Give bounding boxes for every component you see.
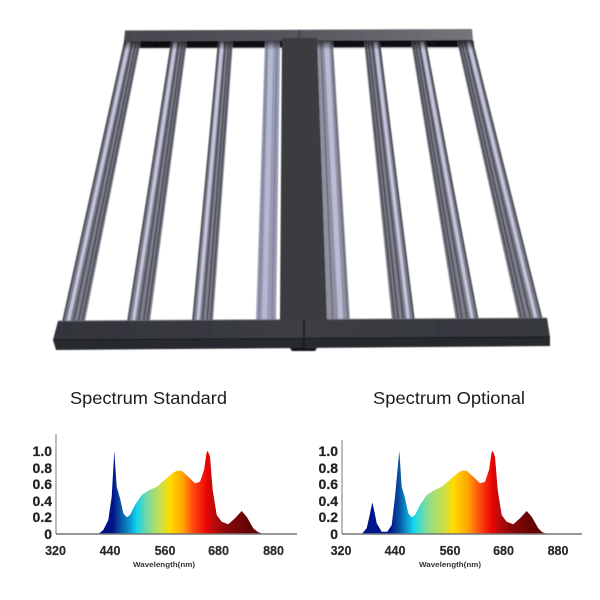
x tick labels: 440 — [385, 544, 405, 558]
bottom rail — [53, 318, 550, 351]
x tick labels: 320 — [331, 544, 351, 558]
x tick labels: 680 — [208, 544, 229, 558]
light bar 6 — [364, 41, 415, 321]
y tick labels: 0.2 — [33, 509, 52, 525]
chart: spectrum standard — [33, 434, 297, 569]
x axis — [342, 533, 582, 535]
y tick labels: 0.4 — [319, 493, 338, 509]
x tick labels: 440 — [100, 544, 120, 558]
heading: spectrum standard: Spectrum Standard — [70, 388, 227, 408]
x tick labels: 560 — [440, 544, 460, 558]
y tick labels: 0.8 — [319, 460, 338, 476]
light bar 8 — [457, 41, 543, 320]
y tick labels: 1.0 — [33, 443, 52, 459]
top rail — [124, 29, 473, 48]
y tick labels: 0.6 — [319, 476, 338, 492]
chart: spectrum optional — [319, 440, 582, 569]
y tick labels: 0.8 — [33, 460, 52, 476]
light bar 4 — [256, 41, 280, 321]
x tick labels: 680 — [493, 544, 514, 558]
light bar 7 — [411, 41, 479, 321]
x tick labels — [331, 544, 568, 558]
x tick labels: 880 — [263, 544, 284, 558]
y axis — [55, 434, 57, 534]
grow light fixture — [53, 29, 550, 351]
y tick labels: 0 — [44, 526, 52, 542]
x tick labels — [45, 544, 284, 558]
x axis — [56, 533, 297, 535]
spectrum curve standard — [98, 451, 263, 534]
x axis title: Wavelength(nm) — [133, 562, 195, 569]
y tick labels — [319, 443, 338, 542]
x tick labels: 320 — [45, 544, 66, 558]
light bar 2 — [127, 41, 187, 321]
y tick labels: 0.4 — [33, 493, 52, 509]
shadow on bar tops — [124, 41, 474, 50]
light bar 3 — [192, 41, 233, 321]
light bar 5 — [317, 41, 350, 321]
x axis title: Wavelength(nm) — [419, 562, 481, 569]
heading: spectrum optional: Spectrum Optional — [373, 388, 525, 408]
y tick labels: 0.6 — [33, 476, 52, 492]
y tick labels: 1.0 — [319, 443, 338, 459]
y tick labels: 0.2 — [319, 509, 338, 525]
y axis — [341, 440, 343, 534]
x tick labels: 560 — [155, 544, 175, 558]
y tick labels: 0 — [330, 526, 338, 542]
light bar 1 — [62, 41, 141, 321]
x tick labels: 880 — [548, 544, 568, 558]
central driver housing — [280, 38, 327, 320]
spectrum curve optional — [362, 451, 547, 534]
y tick labels — [33, 443, 52, 542]
